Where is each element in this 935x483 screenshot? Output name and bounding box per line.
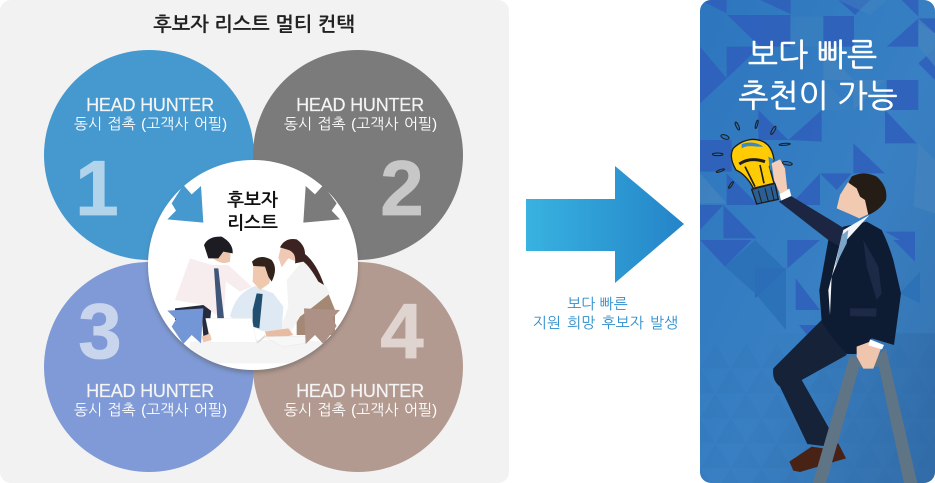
text: faster applicants: 지원 희망 후보자 발생 <box>533 315 678 332</box>
circle 4: brown head hunter: 동시 접촉 (고객사 어필) <box>284 402 437 419</box>
circle 2: grey head hunter: 동시 접촉 (고객사 어필) <box>284 116 437 133</box>
arrow: bottom-left into list <box>167 308 203 344</box>
circle 1: blue head hunter: 1 <box>75 144 119 232</box>
photo: three office workers <box>175 237 335 363</box>
circle 3: periwinkle head hunter: 3 <box>78 287 122 375</box>
heading: faster recommendation possible <box>738 37 898 114</box>
heading: faster recommendation possible: 추천이 가능 <box>738 78 898 114</box>
center circle: candidate list with people <box>148 160 358 373</box>
laptop <box>206 318 257 343</box>
background triangle pattern <box>700 0 935 483</box>
label: candidate list: 리스트 <box>227 213 278 233</box>
arrow: top-left into list <box>167 185 203 223</box>
hand on ladder <box>857 342 882 369</box>
circle 3: periwinkle head hunter <box>44 262 254 472</box>
circle 4: brown head hunter <box>253 262 463 472</box>
circle 2: grey head hunter <box>253 50 463 260</box>
shirt and tie <box>828 215 869 315</box>
circle 3: periwinkle head hunter: 동시 접촉 (고객사 어필) <box>74 402 227 419</box>
label: candidate list: 후보자 <box>227 190 278 210</box>
center man <box>230 286 283 332</box>
heading: candidate list multi contact: 후보자 리스트 멀티 컨택 <box>153 14 355 36</box>
circle 1: blue head hunter <box>44 50 254 260</box>
circle 2: grey head hunter: 2 <box>380 144 424 232</box>
shoes <box>789 443 846 472</box>
circle 2: grey head hunter: HEAD HUNTER <box>296 95 424 115</box>
ladder <box>813 348 917 483</box>
head <box>837 182 870 218</box>
icon: light bulb <box>712 120 793 204</box>
circle 4: brown head hunter: HEAD HUNTER <box>296 381 424 401</box>
text: faster applicants: 보다 빠른 <box>567 296 628 313</box>
circle 1: blue head hunter: 동시 접촉 (고객사 어필) <box>74 116 227 133</box>
trousers <box>773 320 847 447</box>
arrow: top-right into list <box>303 185 340 223</box>
jacket <box>819 222 901 354</box>
circle 4: brown head hunter: 4 <box>380 287 424 375</box>
panel: faster recommendation <box>700 0 935 483</box>
woman <box>297 293 335 335</box>
left man <box>175 305 212 337</box>
arrow: bottom-right into list <box>304 308 340 344</box>
text: faster applicants <box>533 296 678 332</box>
label: candidate list <box>227 190 278 233</box>
arrow: main right arrow <box>526 166 684 283</box>
raised arm <box>779 195 847 247</box>
circle 3: periwinkle head hunter: HEAD HUNTER <box>86 381 214 401</box>
illustration: businessman on ladder <box>772 159 917 483</box>
circle 1: blue head hunter: HEAD HUNTER <box>86 95 214 115</box>
hands and papers <box>265 328 294 336</box>
panel: head hunter candidate list <box>0 0 509 483</box>
heading: faster recommendation possible: 보다 빠른 <box>748 37 877 73</box>
